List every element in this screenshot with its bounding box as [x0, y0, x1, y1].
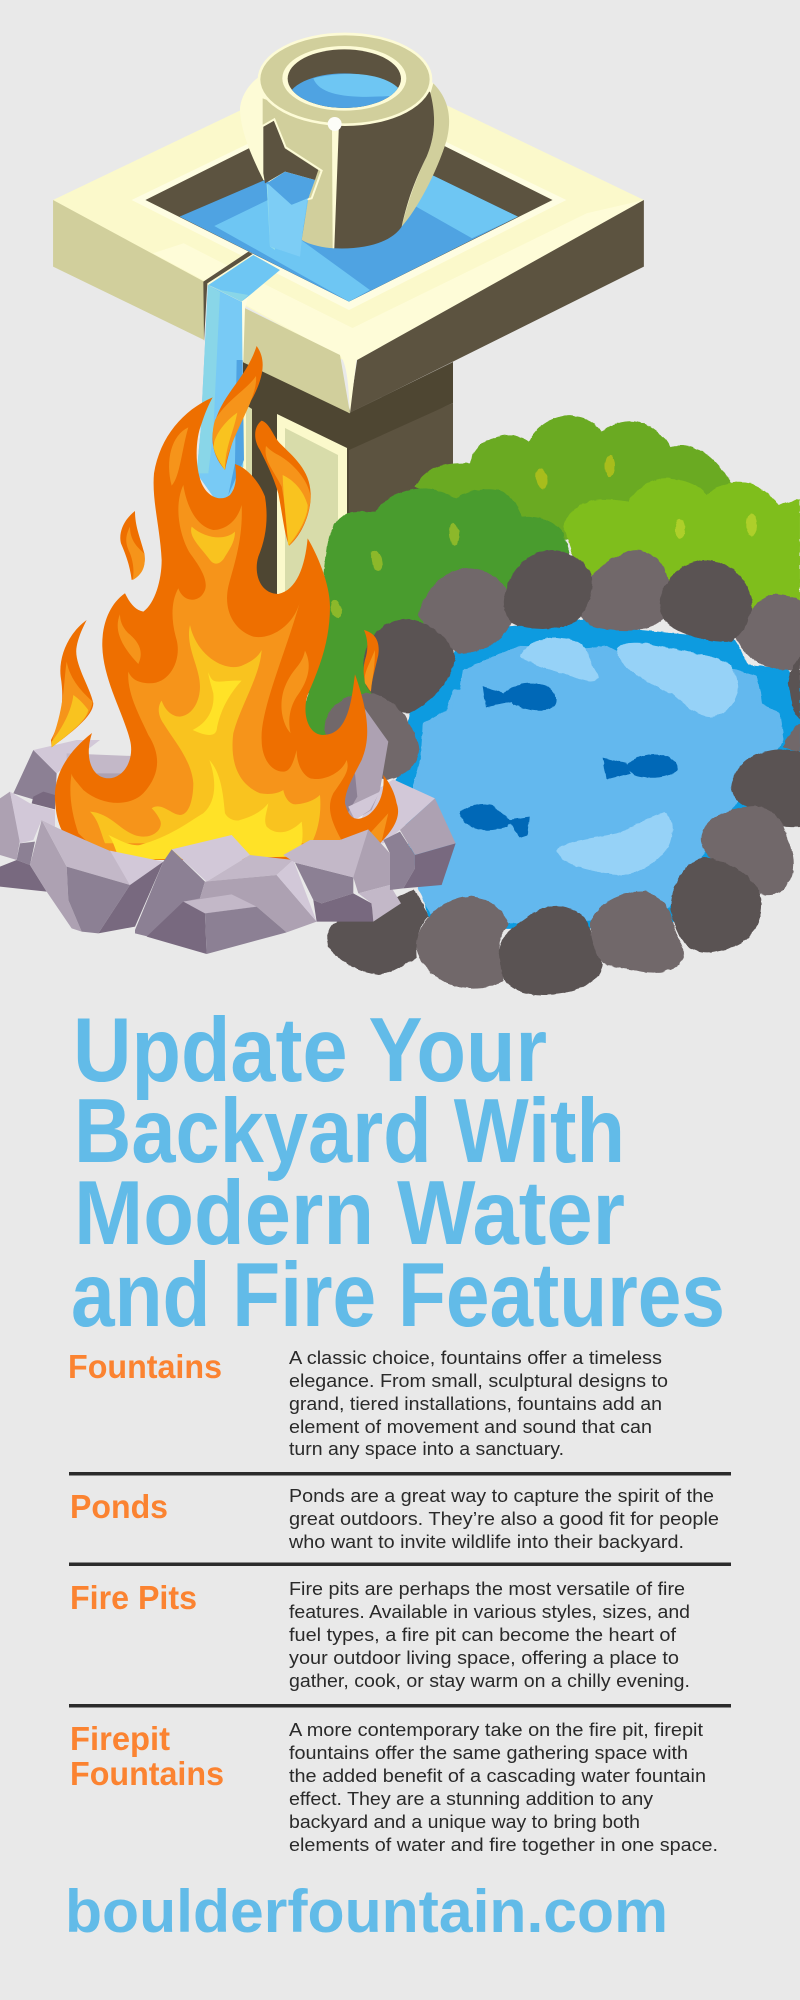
section: ponds — [70, 1485, 719, 1552]
left rocks — [0, 792, 20, 860]
highlight 2 lower — [665, 687, 738, 717]
back bush — [415, 416, 732, 540]
basin water light strip — [413, 173, 518, 238]
heading: firepit fountains — [70, 1720, 224, 1792]
text: firepit fountains description: backyard and a unique way to bring both — [289, 1811, 640, 1832]
corner sliver — [340, 355, 357, 413]
text: ponds description: great outdoors. They’re also a good fit for people — [289, 1508, 719, 1529]
pond upper details — [483, 637, 738, 710]
tall right back rock — [337, 697, 388, 830]
pond outer water — [397, 622, 800, 927]
text: fire pits description: Fire pits are perhaps the most versatile of fire — [289, 1578, 685, 1599]
far right rock top — [350, 779, 435, 843]
text: fire pits description: features. Available in various styles, sizes, and — [289, 1601, 690, 1622]
heading: firepit fountains: Firepit — [70, 1720, 170, 1757]
line from spout — [332, 123, 339, 248]
illustration: flames — [51, 346, 398, 860]
fish 1 — [483, 683, 557, 710]
pond lower details — [459, 687, 738, 875]
heading: fire pits: Fire Pits — [70, 1579, 197, 1616]
centre rock — [135, 849, 205, 937]
vase right edge — [402, 83, 449, 227]
title: Backyard With — [74, 1081, 625, 1182]
text: fire pits description — [289, 1578, 690, 1691]
pond stones lower — [325, 693, 800, 995]
illustration: falling water — [197, 285, 244, 502]
vase dark face — [334, 92, 434, 248]
basin left side — [53, 200, 204, 340]
illustration: fountain basin — [53, 58, 644, 413]
text: fountains description: element of movement and sound that can — [289, 1416, 652, 1437]
far right rock — [400, 798, 456, 855]
right bush leaves — [675, 514, 757, 539]
section: firepit fountains — [70, 1719, 718, 1855]
pond stones upper — [363, 550, 800, 720]
basin top rim — [53, 58, 644, 363]
title — [71, 1000, 725, 1346]
text: fountains description: grand, tiered installations, fountains add an — [289, 1393, 662, 1414]
fish 2 — [603, 754, 678, 779]
back bush leaves — [534, 455, 615, 491]
website url: boulderfountain.com — [65, 1878, 668, 1945]
section: fire pits — [70, 1578, 690, 1691]
vase beige face — [263, 98, 334, 248]
text: firepit fountains description — [289, 1719, 718, 1855]
small left spark — [120, 511, 145, 580]
text: firepit fountains description: the added benefit of a cascading water fountain — [289, 1765, 706, 1786]
front left rock — [30, 820, 82, 932]
title: Modern Water — [74, 1163, 625, 1264]
rim light bands — [327, 200, 644, 360]
pond water — [397, 622, 800, 927]
illustration: vase — [240, 33, 449, 257]
text: fire pits description: gather, cook, or stay warm on a chilly evening. — [289, 1670, 690, 1691]
main flame — [55, 397, 398, 860]
front left side — [242, 307, 350, 413]
text: fire pits description: fuel types, a fire pit can become the heart of — [289, 1624, 677, 1645]
pond inner water — [415, 648, 782, 922]
waterfall inside basin — [267, 183, 302, 257]
right rock — [295, 863, 353, 903]
text: ponds description: Ponds are a great way to capture the spirit of the — [289, 1485, 714, 1506]
illustration: basin front and water channel — [203, 252, 357, 413]
illustration: fountain pillar — [243, 330, 453, 640]
text: ponds description: who want to invite wildlife into their backyard. — [288, 1531, 684, 1552]
left bush — [303, 488, 572, 737]
text: firepit fountains description: effect. They are a stunning addition to any — [289, 1788, 654, 1809]
text: fountains description: A classic choice, fountains offer a timeless — [289, 1347, 662, 1368]
text: firepit fountains description: A more contemporary take on the fire pit, firepit — [289, 1719, 703, 1740]
heading: firepit fountains: Fountains — [70, 1755, 224, 1792]
water seen through break — [267, 172, 315, 205]
right bush — [563, 478, 800, 613]
highlight 1 — [520, 637, 598, 681]
section: fountains — [68, 1347, 668, 1459]
inner pale border — [132, 95, 566, 310]
text: fountains description — [289, 1347, 668, 1459]
far left flame — [51, 620, 93, 747]
right base sliver — [360, 813, 388, 843]
highlight 2 — [617, 643, 738, 693]
vase water — [292, 73, 398, 108]
basin water deep — [180, 172, 518, 302]
vase rim — [258, 33, 432, 126]
mid flame layer — [70, 485, 348, 860]
vase dark break — [263, 120, 318, 183]
water drop — [328, 117, 342, 131]
inner flame lobes — [281, 651, 309, 733]
text: firepit fountains description: elements of water and fire together in one space. — [289, 1834, 718, 1855]
lower rock — [183, 894, 257, 913]
top yellow lobe — [191, 527, 235, 564]
heading: ponds: Ponds — [70, 1488, 168, 1525]
highlight 3 — [557, 813, 672, 875]
text: fountains description: turn any space into a sanctuary. — [289, 1438, 564, 1459]
basin right side — [349, 200, 644, 413]
text: firepit fountains description: fountains offer the same gathering space with — [289, 1742, 688, 1763]
text: fire pits description: your outdoor living space, offering a place to — [289, 1647, 679, 1668]
basin water light patch — [214, 198, 370, 302]
text: fountains description: elegance. From small, sculptural designs to — [289, 1370, 668, 1391]
fish 3 — [459, 804, 529, 837]
channel water — [208, 255, 280, 302]
tall tongue — [213, 346, 263, 470]
text: ponds description — [288, 1485, 719, 1552]
yellow flame layer — [90, 625, 320, 843]
heading: fountains: Fountains — [68, 1348, 222, 1385]
bright yellow centre — [193, 672, 242, 735]
illustration: fire ring back rocks — [13, 697, 435, 843]
bushes — [303, 416, 800, 737]
white edge — [241, 297, 248, 362]
basin inner wall — [145, 98, 553, 302]
illustration: fire ring front rocks — [0, 792, 456, 954]
right tongue — [255, 421, 311, 546]
title: Update Your — [73, 1000, 547, 1101]
crack — [203, 252, 253, 342]
illustration: pond, bushes and stones — [303, 416, 800, 995]
right small flame — [364, 630, 379, 692]
left bush leaves — [329, 523, 460, 619]
vase back — [240, 75, 449, 227]
